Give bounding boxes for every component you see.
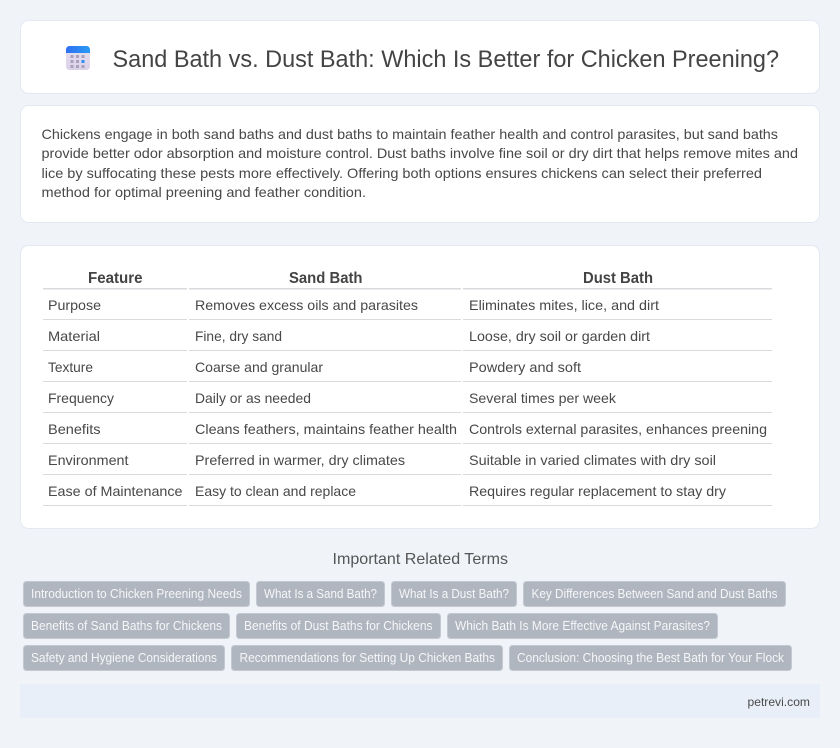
table header row bbox=[43, 270, 772, 289]
row: texture: Texture bbox=[48, 359, 93, 375]
row: benefits bbox=[43, 421, 772, 444]
row: material bbox=[43, 328, 772, 350]
tag: Safety and Hygiene Considerations bbox=[31, 651, 217, 665]
row: material: Fine, dry sand bbox=[195, 328, 282, 344]
related term tags bbox=[24, 582, 792, 670]
row: texture bbox=[43, 359, 772, 382]
tag bbox=[392, 582, 516, 606]
row: ease of maintenance: Easy to clean and replace bbox=[195, 483, 356, 499]
panel: title header bbox=[20, 20, 820, 94]
tag: Which Bath Is More Effective Against Parasites? bbox=[455, 619, 710, 633]
intro paragraph: Chickens engage in both sand baths and dust baths to maintain feather health and control parasites, but sand baths bbox=[42, 126, 778, 142]
row: ease of maintenance: Ease of Maintenance bbox=[48, 483, 183, 499]
tag bbox=[510, 646, 792, 670]
tag: What Is a Dust Bath? bbox=[399, 587, 509, 601]
row: material: Material bbox=[48, 328, 100, 344]
tag: Key Differences Between Sand and Dust Baths bbox=[532, 587, 778, 601]
title: Sand Bath vs. Dust Bath: Which Is Better for Chicken Preening? bbox=[112, 46, 779, 73]
tag: Conclusion: Choosing the Best Bath for Your Flock bbox=[517, 651, 785, 665]
row: environment: Suitable in varied climates with dry soil bbox=[469, 452, 716, 468]
row: purpose: Purpose bbox=[48, 297, 101, 313]
intro paragraph bbox=[42, 126, 798, 200]
row: ease of maintenance bbox=[43, 483, 772, 506]
tag: Benefits of Dust Baths for Chickens bbox=[244, 619, 432, 633]
tag bbox=[232, 646, 502, 670]
tag bbox=[24, 646, 224, 670]
tag bbox=[256, 582, 384, 606]
row: purpose: Eliminates mites, lice, and dirt bbox=[469, 297, 659, 313]
icon: calendar bbox=[66, 46, 90, 70]
row: benefits: Cleans feathers, maintains feather health bbox=[195, 421, 457, 437]
row: frequency: Daily or as needed bbox=[195, 390, 311, 406]
row: purpose bbox=[43, 297, 772, 320]
panel: comparison table bbox=[20, 246, 820, 528]
row: environment: Environment bbox=[48, 452, 129, 468]
row: environment bbox=[43, 452, 772, 474]
table header row: Sand Bath bbox=[289, 270, 362, 287]
tag bbox=[524, 582, 786, 606]
tag: What Is a Sand Bath? bbox=[264, 587, 377, 601]
intro paragraph: provide better odor absorption and moisture control. Dust baths involve fine soil or dry dirt that helps remove mites and bbox=[42, 145, 798, 161]
row: frequency: Frequency bbox=[48, 390, 114, 406]
row: material: Loose, dry soil or garden dirt bbox=[469, 328, 650, 344]
row: frequency: Several times per week bbox=[469, 390, 617, 406]
row: purpose: Removes excess oils and parasites bbox=[195, 297, 418, 313]
tag: Introduction to Chicken Preening Needs bbox=[31, 587, 242, 601]
panel: introduction bbox=[20, 106, 820, 222]
footer bar bbox=[20, 684, 820, 718]
tag: Benefits of Sand Baths for Chickens bbox=[31, 619, 222, 633]
row: environment: Preferred in warmer, dry climates bbox=[195, 452, 405, 468]
row: frequency bbox=[43, 390, 772, 412]
tag bbox=[24, 582, 250, 606]
tag bbox=[24, 614, 230, 638]
tag: Recommendations for Setting Up Chicken Baths bbox=[240, 651, 495, 665]
row: texture: Powdery and soft bbox=[469, 359, 581, 375]
footer site name: petrevi.com bbox=[748, 695, 810, 709]
row: texture: Coarse and granular bbox=[195, 359, 323, 375]
intro paragraph: lice by suffocating these pests more effectively. Offering both options ensures chickens can select their preferred bbox=[42, 165, 762, 181]
heading: related terms: Important Related Terms bbox=[332, 551, 508, 568]
table header row: Dust Bath bbox=[583, 270, 653, 287]
table header row: Feature bbox=[88, 270, 143, 287]
row: benefits: Controls external parasites, enhances preening bbox=[469, 421, 767, 437]
row: benefits: Benefits bbox=[48, 421, 100, 437]
intro paragraph: method for optimal preening and feather condition. bbox=[42, 184, 366, 200]
tag bbox=[236, 614, 440, 638]
tag bbox=[448, 614, 718, 638]
row: ease of maintenance: Requires regular replacement to stay dry bbox=[469, 483, 726, 499]
